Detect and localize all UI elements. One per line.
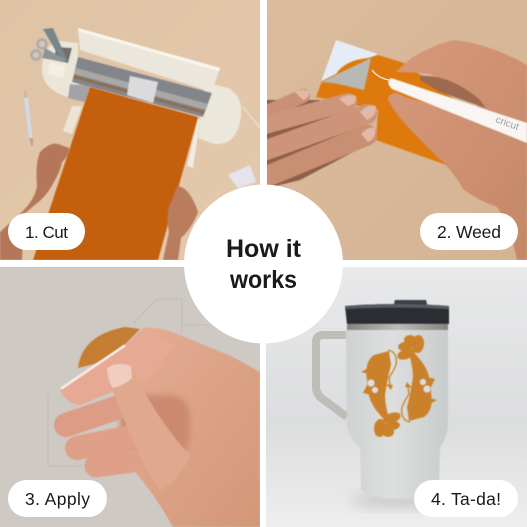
icon: right hand — [388, 40, 527, 260]
label: 3. Apply: 3. Apply — [25, 489, 90, 509]
orange circle — [78, 327, 140, 368]
label: 3. Apply — [8, 480, 107, 517]
centre circle: how it works — [184, 184, 343, 344]
label: 4. Ta-da!: 4. Ta-da! — [431, 489, 501, 509]
icon: weeding pen — [24, 91, 33, 146]
label: 1. Cut — [8, 213, 85, 250]
icon: small white cutter — [228, 165, 256, 188]
icon: scissors — [32, 28, 68, 62]
logo text: cricut — [494, 114, 520, 133]
icon: weeding tool — [372, 70, 527, 143]
icon: hand — [60, 328, 260, 527]
panel: step 3 apply — [0, 267, 260, 527]
fingernails — [295, 90, 376, 142]
heading: works — [229, 266, 297, 294]
icon: koi fish right — [396, 335, 437, 422]
panel: step 2 weed — [258, 0, 527, 260]
icon: left hand fingers — [258, 90, 376, 190]
orange vinyl sheet — [33, 87, 198, 260]
icon: mug body — [345, 300, 449, 499]
icon: mug handle — [316, 335, 347, 417]
heading — [226, 235, 302, 294]
icon: right hand — [163, 186, 198, 260]
icon: left hand — [0, 144, 69, 260]
label: 4. Ta-da! — [414, 480, 518, 517]
panel: step 4 finished mug — [266, 267, 527, 527]
orange vinyl — [316, 55, 472, 167]
label: 2. Weed: 2. Weed — [437, 222, 501, 242]
label: 2. Weed — [420, 213, 518, 250]
icon: cutting machine — [42, 28, 241, 168]
heading: How it — [226, 235, 302, 263]
transfer tape outline — [48, 299, 208, 466]
label: 1. Cut: 1. Cut — [25, 223, 68, 242]
finger shadow gap — [420, 76, 486, 108]
icon: koi fish left — [361, 350, 402, 437]
panel: step 1 cut — [0, 0, 260, 260]
white backing paper — [321, 40, 378, 82]
peeled vinyl flap — [321, 58, 371, 90]
